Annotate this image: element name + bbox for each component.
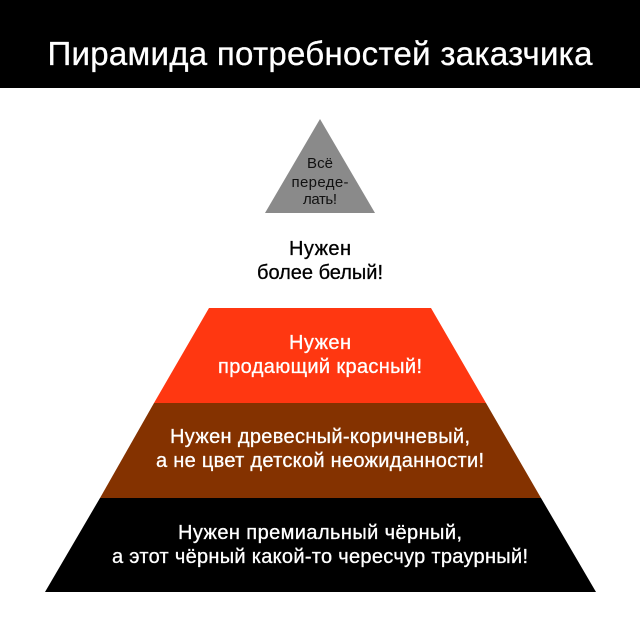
title banner <box>0 0 640 88</box>
pyramid tier: black base: а этот чёрный какой-то чересчур траурный! <box>112 546 528 568</box>
pyramid tier: red <box>154 308 486 403</box>
pyramid tier: brown <box>100 403 541 498</box>
pyramid tier: grey top: переде- <box>292 174 348 191</box>
pyramid tier: grey top <box>265 119 375 213</box>
pyramid tier: brown: а не цвет детской неожиданности! <box>156 450 484 472</box>
pyramid tier: white: более белый! <box>257 262 383 284</box>
pyramid tier: grey top: лать! <box>303 191 337 208</box>
pyramid tier: white: Нужен <box>289 238 351 260</box>
title banner: Пирамида потребностей заказчика <box>48 35 593 72</box>
pyramid tier: grey top: Всё <box>307 155 333 172</box>
pyramid tier: black base: Нужен премиальный чёрный, <box>178 522 462 544</box>
pyramid tier: red: Нужен <box>289 332 351 354</box>
pyramid tier: brown: Нужен древесный-коричневый, <box>170 426 470 448</box>
pyramid tier: white <box>257 238 383 284</box>
pyramid tier: red: продающий красный! <box>218 356 422 378</box>
pyramid tier: black base <box>45 498 596 592</box>
